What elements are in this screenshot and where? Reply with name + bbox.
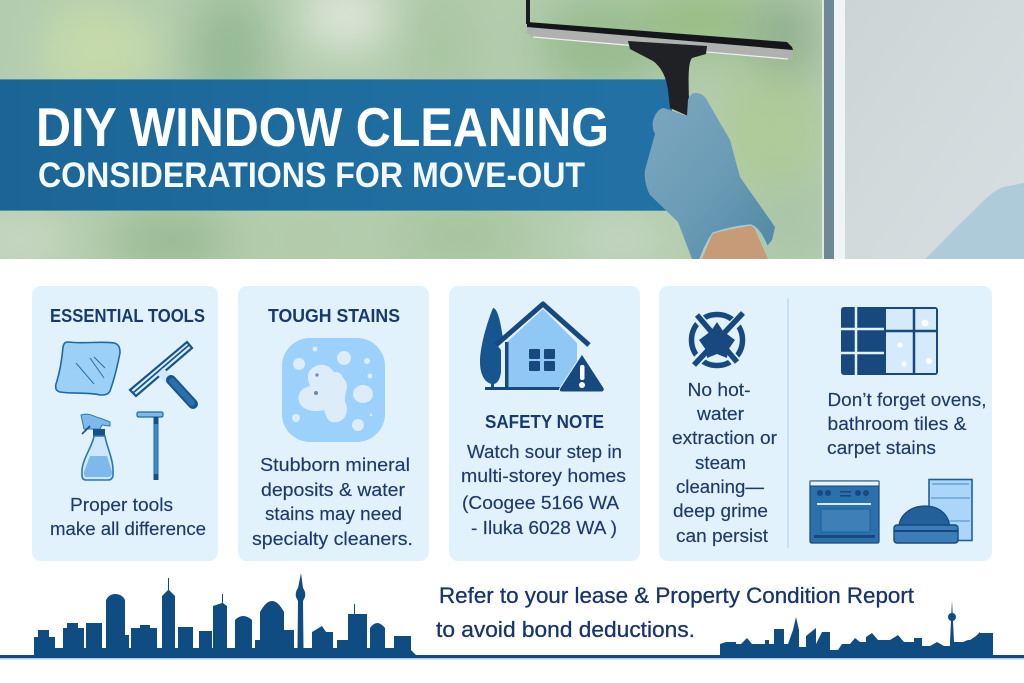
icon: fridge <box>929 480 972 540</box>
text: don't forget: bathroom tiles & <box>828 413 967 434</box>
icon: no steam <box>692 313 744 366</box>
footer note <box>436 583 914 642</box>
squeegee frame <box>526 0 530 24</box>
arm <box>702 225 768 259</box>
panel: extra considerations <box>659 286 992 561</box>
skyline tower <box>296 573 305 648</box>
text: don't forget <box>827 389 986 458</box>
text: stubborn deposits: deposits & water <box>261 479 405 500</box>
title banner <box>0 79 672 211</box>
panel: safety note <box>449 286 640 561</box>
icon: spray bottle <box>81 414 113 480</box>
title: DIY WINDOW CLEANING <box>36 96 609 158</box>
icon: house with warning <box>480 304 604 392</box>
footer note: Refer to your lease & Property Condition Report <box>439 583 914 608</box>
text: safety details: - Iluka 6028 WA ) <box>471 517 617 538</box>
icon: sofa <box>894 506 958 543</box>
panel: essential tools <box>32 286 218 561</box>
text: proper tools: make all difference <box>50 518 206 539</box>
heading: essential tools: ESSENTIAL TOOLS <box>50 306 205 326</box>
text: safety details <box>461 441 626 538</box>
text: stubborn deposits: stains may need <box>265 503 402 524</box>
text: proper tools: Proper tools <box>70 494 173 515</box>
text: stubborn deposits <box>252 454 413 549</box>
squeegee and gloved hand <box>526 0 793 259</box>
subtitle: CONSIDERATIONS FOR MOVE-OUT <box>38 156 585 195</box>
heading: tough stains: TOUGH STAINS <box>268 306 400 326</box>
icon: cloth <box>56 342 120 395</box>
ground line <box>0 655 1024 660</box>
skyline: right <box>720 600 993 655</box>
text: no hot-water extraction: steam <box>695 452 746 473</box>
text: don't forget: Don’t forget ovens, <box>828 389 986 410</box>
glove <box>645 93 775 259</box>
skyline: left <box>34 573 416 655</box>
text: safety details: Watch sour step in <box>467 441 622 462</box>
icon: oven <box>810 481 879 543</box>
icon: tiles and window <box>841 307 938 375</box>
icon: stained surface <box>282 338 385 442</box>
icon: extension pole <box>137 412 163 480</box>
text: safety details: multi-storey homes <box>461 465 626 486</box>
text: no hot-water extraction: cleaning— <box>676 476 764 497</box>
heading: safety note: SAFETY NOTE <box>485 412 604 432</box>
footer note: to avoid bond deductions. <box>436 617 695 642</box>
small tower <box>948 613 956 621</box>
text: safety details: (Coogee 5166 WA <box>462 492 620 513</box>
text: no hot-water extraction: can persist <box>676 525 768 546</box>
icon: squeegee <box>130 342 193 404</box>
text: don't forget: carpet stains <box>827 437 936 458</box>
window frame <box>824 0 834 259</box>
text: no hot-water extraction: No hot- <box>688 379 750 400</box>
text: no hot-water extraction: extraction or <box>672 427 777 448</box>
text: no hot-water extraction: deep grime <box>673 500 768 521</box>
sleeve at lower right <box>925 183 1024 259</box>
text: no hot-water extraction: water <box>696 403 744 424</box>
text: stubborn deposits: specialty cleaners. <box>252 528 413 549</box>
panel: tough stains <box>238 286 429 561</box>
text: proper tools <box>50 494 206 539</box>
squeegee handle <box>628 41 707 116</box>
hero photo: window with blurred garden <box>0 0 1024 265</box>
text: stubborn deposits: Stubborn mineral <box>260 454 410 475</box>
text: no hot-water extraction <box>672 379 777 546</box>
